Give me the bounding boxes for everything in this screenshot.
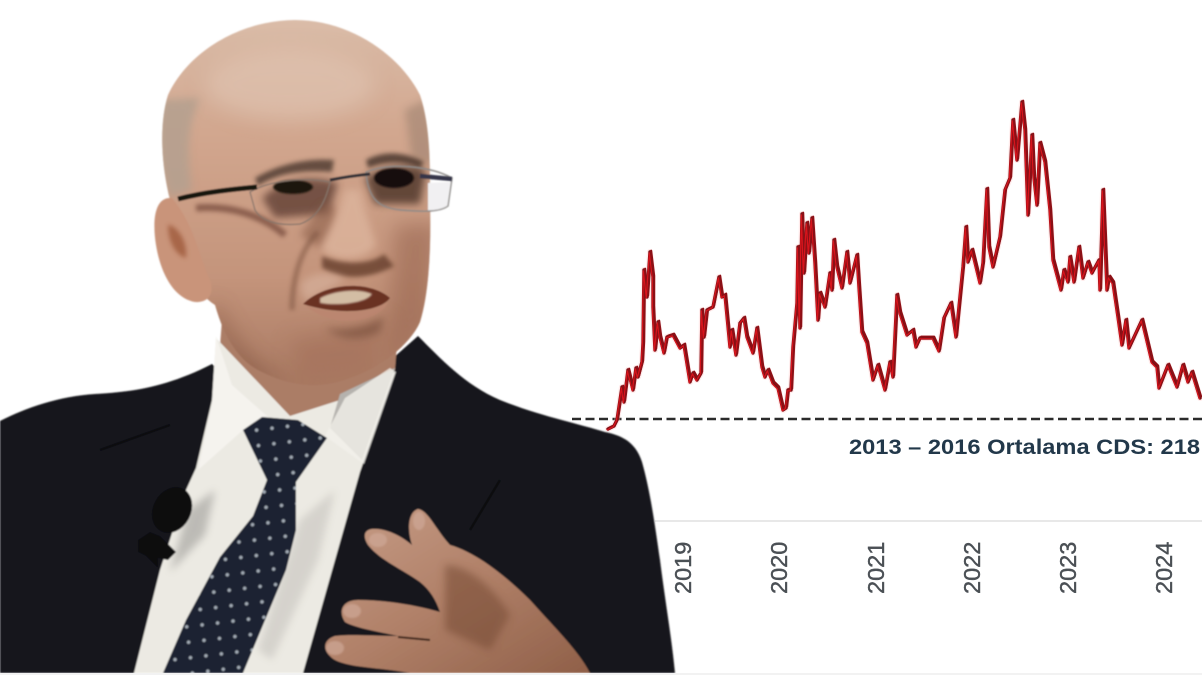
nose — [322, 190, 376, 258]
reference dashed line — [572, 418, 1202, 420]
mouth — [303, 286, 390, 311]
left lens — [250, 180, 330, 224]
shirt shadow — [330, 368, 395, 460]
head — [162, 20, 430, 385]
year labels: 2023 — [1055, 542, 1081, 594]
nose bridge shadow — [300, 204, 336, 248]
person: man in suit with glasses — [0, 20, 675, 673]
mic head — [144, 480, 200, 540]
axis line — [655, 520, 1202, 522]
teeth — [320, 291, 372, 304]
microphone — [138, 480, 200, 568]
fingernails — [326, 512, 425, 655]
neck — [218, 320, 398, 440]
suit jacket — [0, 336, 675, 673]
hand — [325, 509, 590, 673]
inner ear — [168, 225, 186, 258]
forehead highlight — [210, 56, 370, 122]
hand shading — [445, 565, 510, 650]
reference label: 2013 – 2016 Ortalama CDS: 218 — [849, 436, 1200, 459]
right lens — [366, 166, 452, 211]
year labels: 2020 — [766, 542, 792, 594]
year labels: 2019 — [670, 542, 696, 594]
eye sockets — [262, 179, 338, 218]
bridge and top bar — [330, 174, 370, 180]
CDS series line — [607, 101, 1201, 430]
year labels: 2021 — [863, 542, 889, 594]
bottom strip — [0, 673, 1202, 675]
glasses shadow — [196, 207, 285, 235]
chart: CDS line chart — [572, 101, 1202, 594]
lip shadow — [325, 316, 384, 338]
mic clip — [138, 532, 176, 568]
lower lip — [306, 302, 388, 321]
tie — [163, 417, 327, 673]
year labels — [670, 542, 1177, 594]
collar — [198, 336, 268, 470]
nose shadow — [322, 254, 394, 277]
suit lapel seam — [100, 425, 500, 530]
shirt — [134, 338, 395, 673]
temple arm — [178, 187, 257, 199]
eyes — [273, 180, 313, 194]
ear — [154, 198, 211, 302]
face shadows — [216, 306, 278, 378]
eyebrows — [255, 160, 334, 186]
glasses — [178, 166, 452, 224]
hair sides — [157, 98, 200, 197]
right lens white outside head — [428, 182, 450, 211]
face shading clipped to head — [157, 50, 440, 385]
year labels: 2024 — [1151, 542, 1177, 594]
finger gap — [398, 637, 430, 640]
year labels: 2022 — [959, 542, 985, 594]
upper lip highlight — [300, 274, 345, 302]
nasolabial fold — [292, 232, 318, 310]
